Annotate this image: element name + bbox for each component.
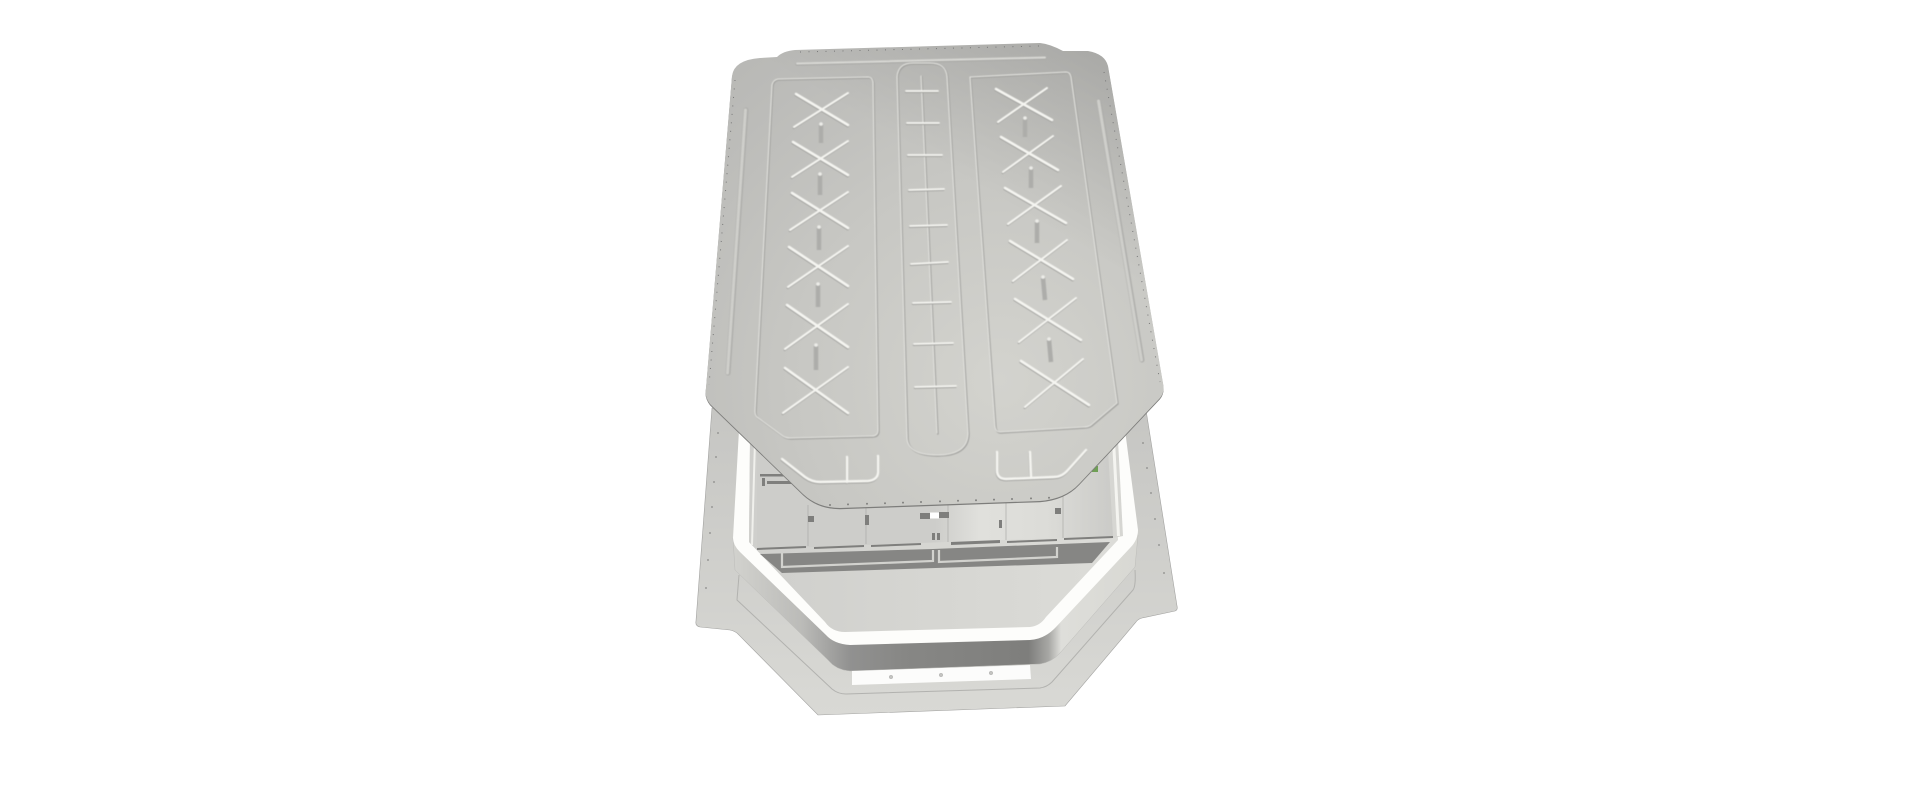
left inner side wall — [749, 440, 758, 548]
flange bolt holes — [705, 432, 1165, 589]
top lid plate — [706, 43, 1164, 509]
tray floor — [749, 440, 1118, 632]
right inner side wall — [1106, 440, 1123, 538]
panel dividers — [808, 495, 1063, 546]
lid shadow edge — [706, 44, 1164, 509]
white tray rim — [733, 430, 1138, 645]
lid side and top slots — [728, 58, 1142, 373]
lid surface — [706, 43, 1164, 508]
front wall of tray — [733, 535, 1138, 671]
lid edge rivets — [709, 46, 1160, 385]
lid top-right shading — [706, 43, 1164, 508]
connector squares — [808, 508, 1061, 540]
back wall panels — [757, 432, 1113, 549]
tray interior — [749, 432, 1123, 632]
lower enclosure flange — [696, 408, 1177, 715]
lid X ribs and ladder rungs — [782, 88, 1089, 483]
lid panel outlines — [755, 63, 1118, 456]
white mounting plate — [852, 665, 1031, 685]
dark cable channel — [760, 542, 1110, 573]
green connector — [1092, 466, 1098, 472]
panel dark strips — [757, 474, 1113, 550]
flange stepped recess — [737, 570, 1135, 694]
channel loops — [782, 547, 1057, 567]
lid vertical pins — [814, 116, 1051, 370]
